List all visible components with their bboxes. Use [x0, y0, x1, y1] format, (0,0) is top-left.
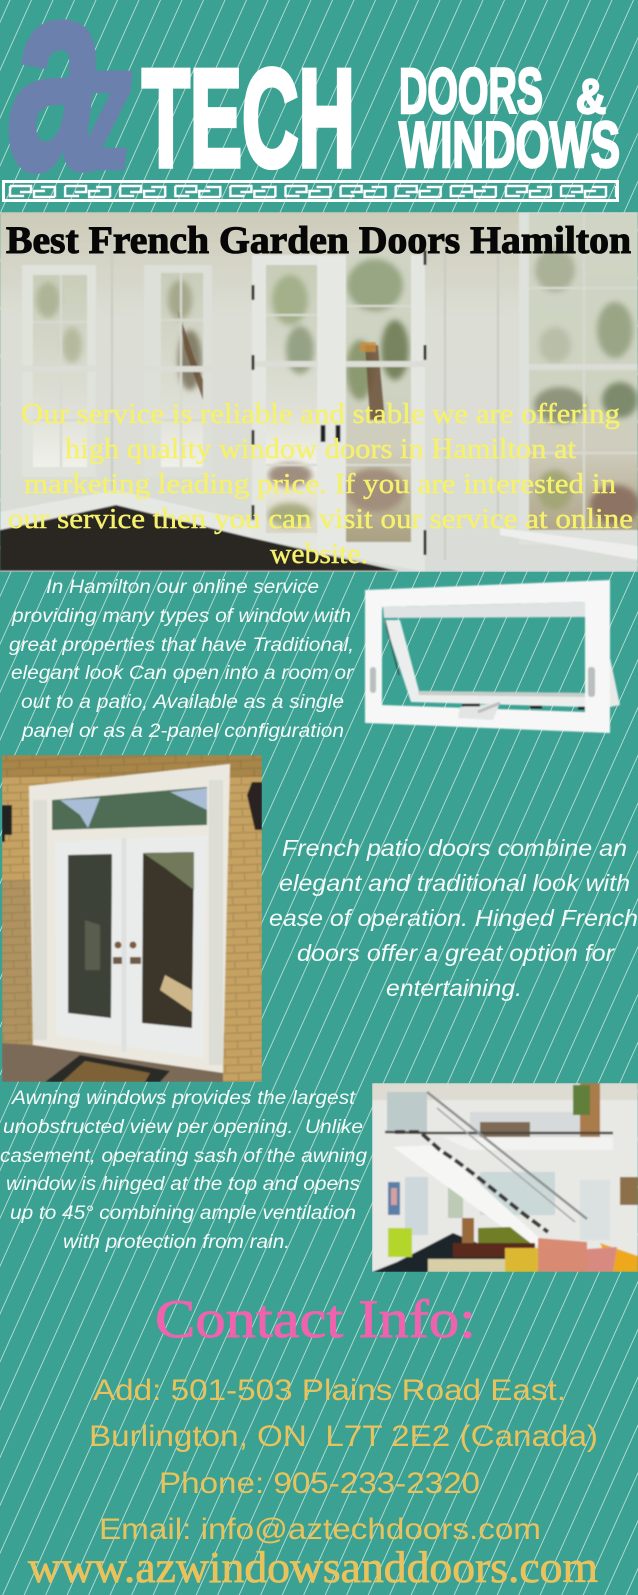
contact details — [89, 1374, 598, 1546]
door handles — [114, 942, 122, 948]
yellow intro paragraph: website. — [270, 539, 368, 570]
door hardware — [253, 250, 425, 555]
text block: window types: panel or as a 2-panel configuration — [21, 720, 344, 742]
porch floor and mat — [2, 1043, 223, 1082]
text block: window types: providing many types of window with — [11, 605, 351, 627]
text block: awning windows: Awning windows provides the largest — [11, 1087, 357, 1109]
text block: French patio doors: French patio doors combine an — [282, 835, 627, 861]
staircase — [393, 1145, 547, 1245]
text block: French patio doors: entertaining. — [386, 975, 522, 1001]
website: www.azwindowsanddoors.com — [28, 1543, 598, 1592]
photo: white French patio door in brick wall — [2, 755, 262, 1082]
text block: window types: out to a patio, Available as a single — [21, 691, 344, 713]
text block: awning windows: up to 45° combining ample ventilation — [10, 1202, 356, 1224]
text block: awning windows: with protection from rain. — [63, 1231, 290, 1253]
upper floor — [470, 1112, 590, 1137]
yellow intro paragraph — [8, 399, 633, 570]
wall art and lower windows — [388, 1182, 400, 1215]
floor — [0, 505, 399, 571]
text block: French patio doors: elegant and traditional look with — [279, 870, 630, 896]
door panels — [55, 836, 207, 1058]
lower floor — [372, 1233, 507, 1272]
text block: window types: elegant look Can open into a room or — [11, 662, 355, 684]
logo: Aztech Doors & Windows — [4, 0, 620, 226]
text block: window types — [9, 576, 355, 742]
text block: French patio doors — [269, 835, 638, 1001]
address line 2: Burlington, ON L7T 2E2 (Canada) — [89, 1420, 598, 1453]
phone: Phone: 905-233-2320 — [159, 1467, 480, 1500]
logo word: TECH: TECH — [142, 40, 355, 196]
right door glass — [142, 852, 194, 1028]
glass — [33, 265, 317, 533]
yellow intro paragraph: our service then you can visit our service at online — [8, 504, 633, 535]
heading: Best French Garden Doors Hamilton — [6, 219, 631, 262]
text block: awning windows: casement, operating sash of the awning — [0, 1145, 367, 1167]
window frames — [22, 265, 96, 314]
tree trunks — [178, 310, 385, 420]
logo meander border — [4, 182, 618, 200]
transom glass — [52, 787, 207, 830]
logo mark: az: z — [81, 5, 132, 206]
wall lamps — [2, 805, 12, 842]
sofa cushions — [505, 1248, 542, 1272]
address line 1: Add: 501-503 Plains Road East. — [93, 1374, 566, 1407]
logo ampersand: & — [576, 71, 606, 124]
panel: hero photo of French doors — [0, 212, 638, 572]
text block: window types: In Hamilton our online service — [46, 576, 319, 598]
photo: interior with glass staircase — [372, 1083, 638, 1272]
text block: window types: great properties that have Traditional, — [9, 634, 354, 656]
text block: French patio doors: doors offer a great option for — [297, 940, 615, 966]
yellow intro paragraph: marketing leading price. If you are interested in — [24, 469, 616, 500]
wall — [0, 212, 638, 572]
text block: awning windows: window is hinged at the top and opens — [6, 1173, 360, 1195]
glazing bars — [33, 213, 638, 530]
left door glass — [68, 854, 112, 1018]
yellow intro paragraph: high quality window doors in Hamilton at — [65, 434, 576, 465]
text block: French patio doors: ease of operation. Hinged French — [269, 905, 638, 931]
contact info heading: Contact Info: — [155, 1289, 476, 1349]
image: awning window — [365, 580, 620, 733]
yellow intro paragraph: Our service is reliable and stable we are offering — [21, 399, 620, 430]
email: Email: info@aztechdoors.com — [99, 1513, 541, 1546]
text block: awning windows — [0, 1087, 367, 1253]
logo word: DOORS: DOORS — [399, 56, 543, 127]
door surround — [29, 764, 230, 1073]
text block: awning windows: unobstructed view per opening. Unlike — [3, 1116, 363, 1138]
